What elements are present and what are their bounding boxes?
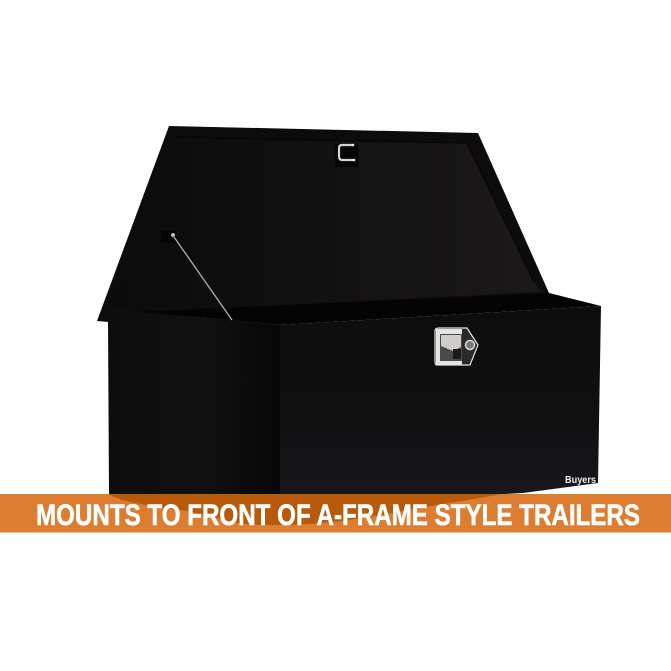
toolbox — [97, 126, 601, 496]
icon: lid hasp — [335, 144, 358, 167]
right face — [280, 306, 601, 496]
orange band — [0, 494, 671, 532]
logo: Buyers badge: Buyers — [565, 475, 596, 486]
banner — [0, 494, 671, 532]
lid support strut — [161, 231, 232, 320]
open lid — [97, 126, 560, 322]
icon: chrome paddle latch — [435, 328, 478, 365]
box interior — [137, 293, 601, 325]
left face — [108, 308, 280, 495]
box shadow on band — [108, 494, 502, 525]
